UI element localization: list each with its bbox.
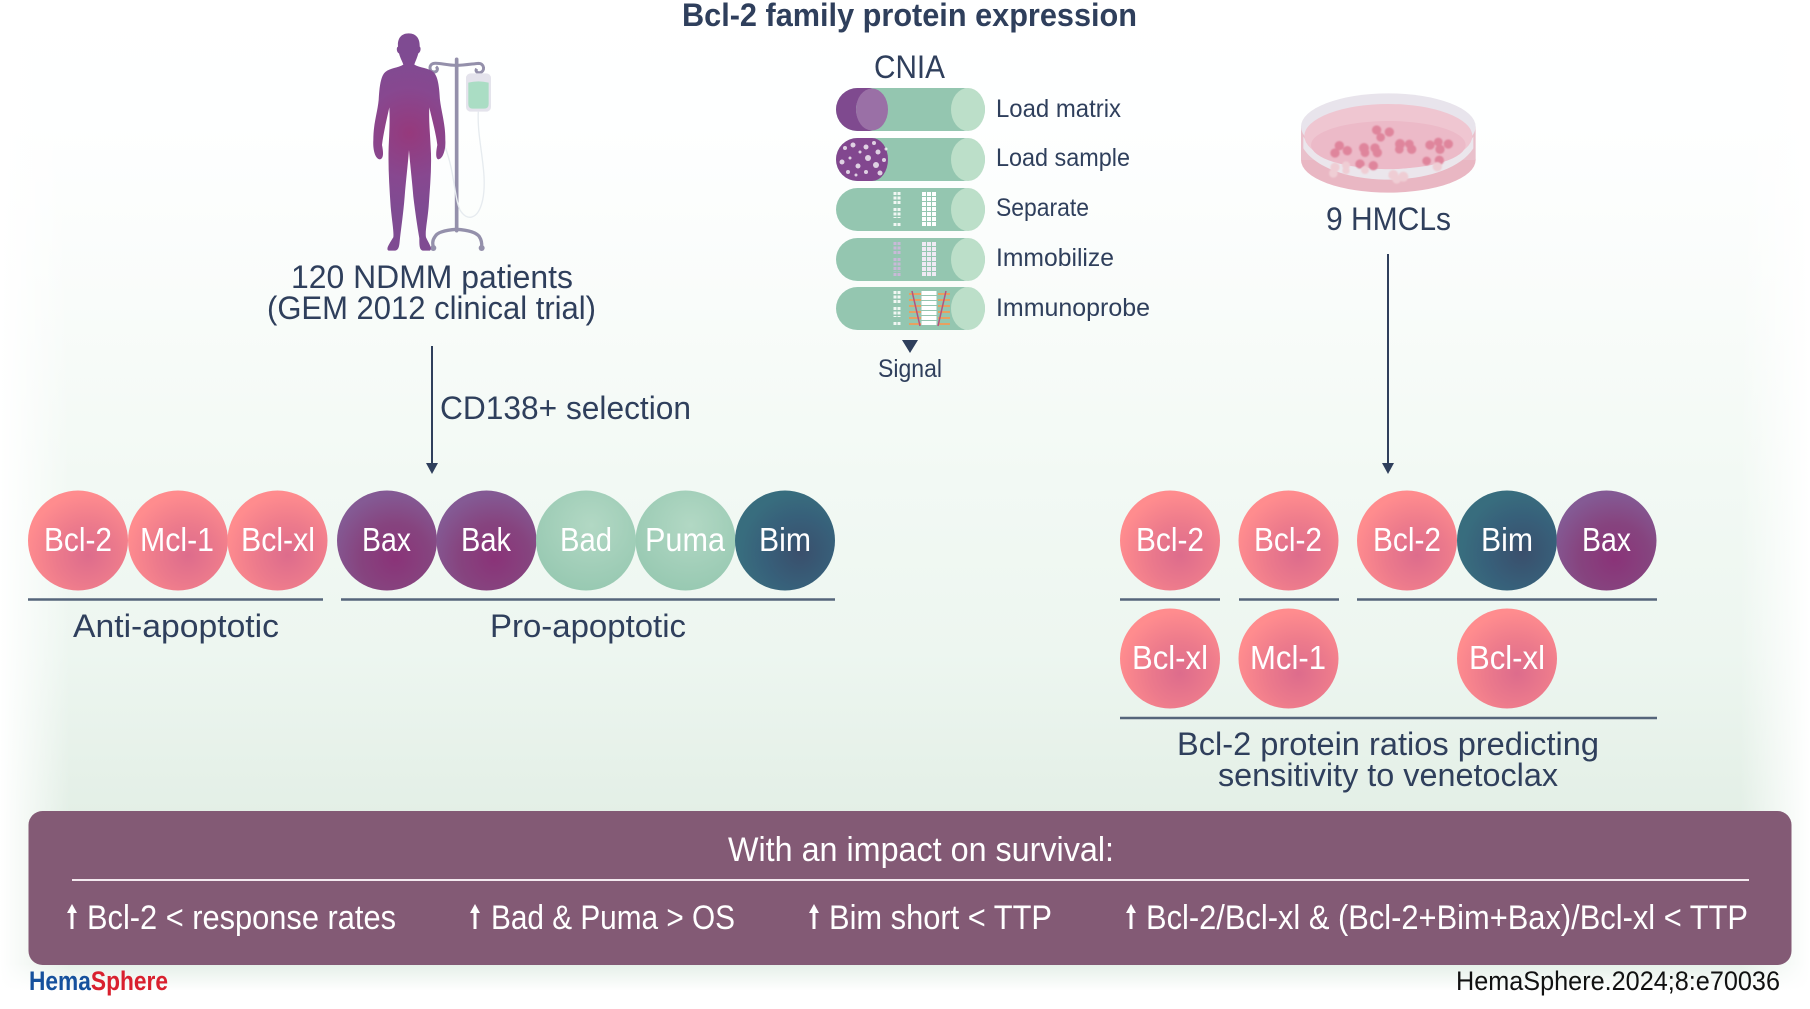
- node: Mcl-1 denominator 2: [1238, 608, 1338, 708]
- heading: CNIA: CNIA: [874, 49, 946, 85]
- node: Bak: [436, 490, 536, 590]
- node: Bak: Bak: [461, 521, 511, 558]
- node: Bcl-xl denominator 3: Bcl-xl: [1469, 639, 1545, 676]
- arrow: down to signal: [902, 340, 918, 353]
- panel: impact on survival: [28, 811, 1792, 965]
- icon: IV stand: [430, 59, 491, 251]
- step labels: Load sample: [996, 144, 1130, 172]
- node: Puma: Puma: [645, 521, 726, 558]
- node: Bim: Bim: [759, 521, 811, 558]
- label: anti-apoptotic: Anti-apoptotic: [73, 608, 279, 644]
- label: 9 HMCLs: 9 HMCLs: [1326, 201, 1451, 237]
- step labels: [996, 95, 1150, 322]
- label: ratios caption: Bcl-2 protein ratios predicting: [1177, 726, 1599, 762]
- capillary: separate: [836, 188, 985, 231]
- node: Bax: [337, 490, 437, 590]
- finding: Bim short: Bim short < TTP: [829, 899, 1052, 937]
- node: Mcl-1: Mcl-1: [140, 521, 214, 558]
- node: Bcl-2 ratio 2: [1238, 490, 1338, 590]
- label: ratios caption: sensitivity to venetoclax: [1218, 757, 1558, 793]
- arrow: CD138+ selection: [426, 346, 438, 474]
- label: pro-apoptotic: Pro-apoptotic: [490, 608, 686, 644]
- node: Mcl-1: [128, 490, 228, 590]
- node: Bad: Bad: [560, 521, 612, 558]
- capillary: load sample: [836, 138, 985, 181]
- step labels: Load matrix: [996, 95, 1121, 123]
- node: Bcl-xl: [228, 490, 328, 590]
- finding: Bad and Puma: Bad & Puma > OS: [491, 899, 735, 937]
- capillary: immobilize: [836, 238, 985, 281]
- node: Bim ratio 3: [1457, 490, 1557, 590]
- text: patient cohort: (GEM 2012 clinical trial): [267, 290, 596, 326]
- node: Bax: Bax: [362, 521, 411, 558]
- arrow: HMCLs to ratios: [1382, 254, 1394, 474]
- capillary: load matrix: [836, 88, 985, 131]
- node: Puma: [636, 490, 736, 590]
- step labels: Immobilize: [996, 244, 1114, 272]
- step labels: Separate: [996, 194, 1089, 222]
- node: Bax ratio 3: [1556, 490, 1656, 590]
- node: Bcl-2 ratio 1: Bcl-2: [1136, 521, 1204, 558]
- icon: petri dish: [1301, 93, 1476, 193]
- citation: HemaSphere.2024;8:e70036: [1456, 966, 1780, 996]
- capillary: immunoprobe: [836, 287, 985, 330]
- node: Bcl-xl denominator 3: [1457, 608, 1557, 708]
- node: Bcl-xl: Bcl-xl: [241, 521, 315, 558]
- finding: Bcl-2: Bcl-2 < response rates: [87, 899, 396, 937]
- text: patient cohort: 120 NDMM patients: [291, 259, 573, 295]
- text: patient cohort: [267, 259, 596, 326]
- label: ratios caption: [1177, 726, 1599, 793]
- node: Bcl-2: Bcl-2: [44, 521, 112, 558]
- node: Bax ratio 3: Bax: [1582, 521, 1631, 558]
- node: Bim ratio 3: Bim: [1481, 521, 1533, 558]
- step labels: Immunoprobe: [996, 294, 1150, 322]
- node: Bcl-2 ratio 1: [1120, 490, 1220, 590]
- node: Bim: [735, 490, 835, 590]
- node: Bcl-2: [28, 490, 128, 590]
- node: Bad: [536, 490, 636, 590]
- node: Mcl-1 denominator 2: Mcl-1: [1250, 639, 1326, 676]
- group: pro-apoptotic proteins: [337, 490, 835, 644]
- node: Bcl-2 ratio 2: Bcl-2: [1254, 521, 1322, 558]
- panel heading: With an impact on survival:: [728, 831, 1114, 869]
- node: Bcl-2 ratio 3: Bcl-2: [1373, 521, 1441, 558]
- finding: ratios: Bcl-2/Bcl-xl & (Bcl-2+Bim+Bax)/Bcl-xl < TTP: [1146, 899, 1748, 937]
- icon: patient with IV stand: [373, 33, 491, 251]
- node: Bcl-2 ratio 3: [1357, 490, 1457, 590]
- logo: HemaSphere: HemaSphere: [29, 966, 168, 996]
- node: Bcl-xl denominator 1: [1120, 608, 1220, 708]
- label: signal: Signal: [878, 355, 942, 383]
- group: anti-apoptotic proteins: [28, 490, 328, 644]
- icon: human figure: [373, 33, 445, 251]
- panel: CNIA workflow: [836, 49, 1150, 383]
- group: predictive Bcl-2 ratios: [1120, 490, 1657, 793]
- node: Bcl-xl denominator 1: Bcl-xl: [1132, 639, 1208, 676]
- label: CD138+ selection: CD138+ selection: [440, 390, 691, 426]
